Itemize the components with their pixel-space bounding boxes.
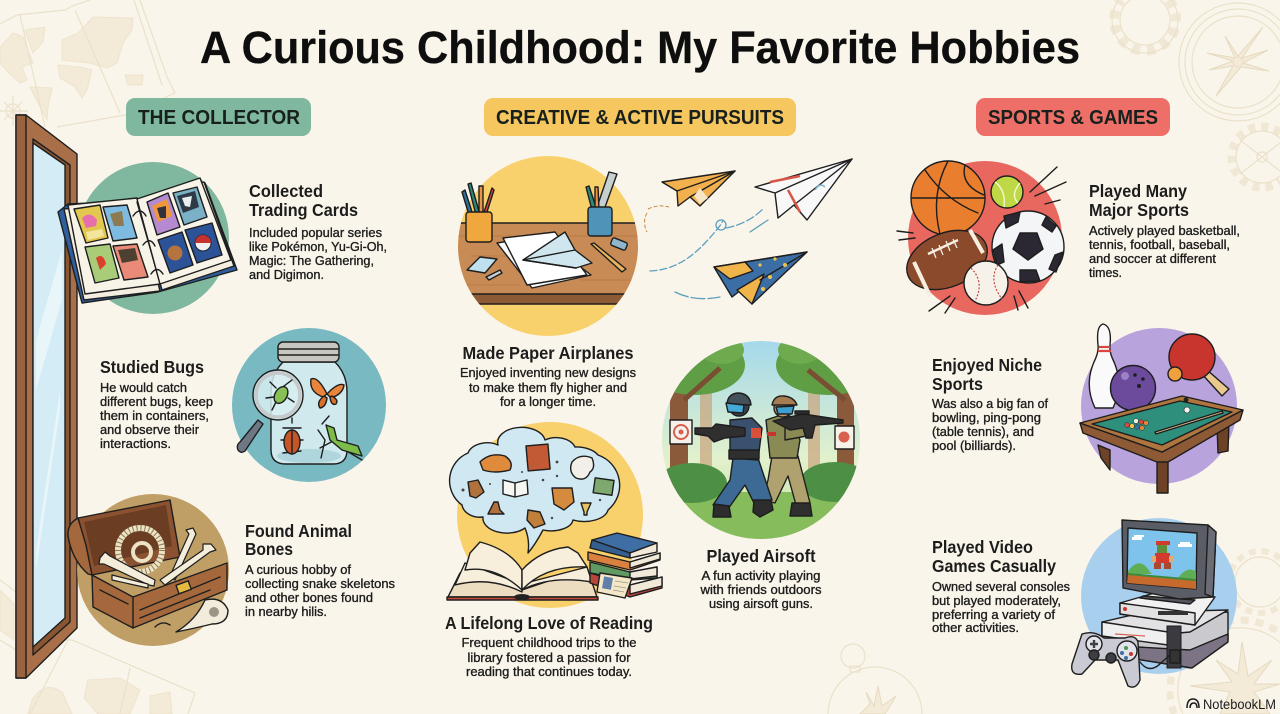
panel: studied bugs bbox=[100, 328, 386, 482]
text: found animal bones: and other bones found bbox=[245, 590, 373, 605]
icon: bug jar with magnifying glass bbox=[232, 328, 386, 482]
heading pill: the collector bbox=[126, 98, 311, 136]
decoration: pocket compass bottom center bbox=[828, 644, 922, 714]
text: played video games casually bbox=[932, 537, 1070, 635]
text: played airsoft: with friends outdoors bbox=[699, 582, 822, 597]
text: found animal bones bbox=[245, 521, 395, 619]
panel: enjoyed niche sports bbox=[932, 324, 1243, 493]
icon: airsoft players in forest bbox=[662, 341, 860, 539]
text: played many major sports: and soccer at different bbox=[1089, 251, 1216, 266]
decoration: map bottom left bbox=[0, 580, 195, 714]
text: studied bugs: interactions. bbox=[100, 436, 171, 451]
text: made paper airplanes: Enjoyed inventing new designs bbox=[460, 365, 636, 380]
icon: blue paper airplane bbox=[714, 252, 807, 304]
text: found animal bones: A curious hobby of bbox=[245, 562, 351, 577]
text: played video games casually: but played moderately, bbox=[932, 593, 1061, 608]
panel: found animal bones bbox=[68, 494, 395, 646]
text: a lifelong love of reading: A Lifelong Love of Reading bbox=[445, 613, 653, 633]
icon: sports balls bbox=[897, 161, 1066, 315]
text: made paper airplanes: Made Paper Airplanes bbox=[462, 343, 634, 363]
text: played many major sports: Major Sports bbox=[1089, 200, 1189, 220]
text: studied bugs bbox=[100, 357, 213, 451]
text: enjoyed niche sports: Enjoyed Niche bbox=[932, 355, 1042, 375]
text: played airsoft: using airsoft guns. bbox=[709, 596, 813, 611]
text: enjoyed niche sports: bowling, ping-pong bbox=[932, 410, 1041, 425]
text: collected trading cards: and Digimon. bbox=[249, 267, 324, 282]
text: played many major sports bbox=[1089, 181, 1240, 280]
text: made paper airplanes bbox=[460, 343, 636, 409]
decoration: gears and compass bottom right bbox=[1170, 551, 1280, 714]
text: played video games casually: Played Video bbox=[932, 537, 1033, 557]
text: enjoyed niche sports: Sports bbox=[932, 374, 983, 394]
heading pill: sports and games: SPORTS & GAMES bbox=[988, 107, 1158, 129]
text: enjoyed niche sports bbox=[932, 355, 1048, 453]
text: studied bugs: Studied Bugs bbox=[100, 357, 204, 377]
text: studied bugs: and observe their bbox=[100, 422, 200, 437]
text: found animal bones: Found Animal bbox=[245, 521, 352, 541]
heading pill: the collector: THE COLLECTOR bbox=[138, 107, 301, 129]
text: enjoyed niche sports: pool (billiards). bbox=[932, 438, 1016, 453]
icon: open book with thought cloud and book stack bbox=[447, 422, 662, 608]
text: found animal bones: Bones bbox=[245, 539, 293, 559]
text: collected trading cards: Magic: The Gathering, bbox=[249, 253, 374, 268]
heading pill: creative and active pursuits bbox=[484, 98, 796, 136]
text: played many major sports: Played Many bbox=[1089, 181, 1187, 201]
text: played video games casually: Games Casually bbox=[932, 556, 1056, 576]
text: studied bugs: He would catch bbox=[100, 380, 187, 395]
panel: collected trading cards bbox=[58, 162, 387, 314]
text: collected trading cards: Trading Cards bbox=[249, 200, 358, 220]
text: enjoyed niche sports: Was also a big fan of bbox=[932, 396, 1048, 411]
heading pill: sports and games bbox=[976, 98, 1170, 136]
text: played many major sports: Actively played basketball, bbox=[1089, 223, 1240, 238]
title: A Curious Childhood: My Favorite Hobbies bbox=[200, 22, 1080, 73]
icon: orange paper airplane bbox=[644, 171, 735, 232]
text: played video games casually: Owned several consoles bbox=[932, 579, 1070, 594]
text: collected trading cards bbox=[249, 181, 387, 282]
text: found animal bones: collecting snake skeletons bbox=[245, 576, 395, 591]
panel: played many major sports bbox=[897, 161, 1240, 315]
text: played airsoft: Played Airsoft bbox=[706, 546, 816, 566]
text: a lifelong love of reading: Frequent childhood trips to the bbox=[462, 635, 636, 650]
text: studied bugs: them in containers, bbox=[100, 408, 209, 423]
text: a lifelong love of reading: library fostered a passion for bbox=[468, 650, 631, 665]
icon: bowling, ping-pong and pool table bbox=[1080, 324, 1243, 493]
text: collected trading cards: Included popular series bbox=[249, 225, 382, 240]
text: collected trading cards: Collected bbox=[249, 181, 323, 201]
text: played airsoft bbox=[699, 546, 822, 611]
text: enjoyed niche sports: (table tennis), and bbox=[932, 424, 1034, 439]
text: made paper airplanes: to make them fly higher and bbox=[469, 380, 627, 395]
text: found animal bones: in nearby hilis. bbox=[245, 604, 327, 619]
icon: desk with paper and pencils bbox=[450, 156, 646, 336]
illustration: mirror bbox=[16, 115, 77, 678]
text: played many major sports: tennis, football, baseball, bbox=[1089, 237, 1230, 252]
decoration: world map top left bbox=[0, 0, 175, 127]
icon: trading card binder bbox=[58, 162, 237, 314]
text: played video games casually: preferring a variety of bbox=[932, 607, 1055, 622]
text: played many major sports: times. bbox=[1089, 265, 1122, 280]
decoration: gears and compass top right bbox=[1112, 0, 1280, 187]
icon: retro console and controller bbox=[1072, 518, 1237, 687]
panel: made paper airplanes bbox=[450, 156, 852, 409]
panel: a lifelong love of reading bbox=[445, 422, 662, 679]
text: played video games casually: other activities. bbox=[932, 620, 1019, 635]
icon: white paper airplane bbox=[755, 159, 852, 220]
text: studied bugs: different bugs, keep bbox=[100, 394, 213, 409]
text: made paper airplanes: for a longer time. bbox=[500, 394, 596, 409]
icon: treasure chest with bones bbox=[68, 494, 229, 646]
text: a lifelong love of reading: reading that continues today. bbox=[466, 664, 632, 679]
panel: played video games casually bbox=[932, 518, 1237, 687]
text: played airsoft: A fun activity playing bbox=[702, 568, 820, 583]
text: collected trading cards: like Pokémon, Yu-Gi-Oh, bbox=[249, 239, 387, 254]
heading pill: creative and active pursuits: CREATIVE & ACTIVE PURSUITS bbox=[496, 107, 784, 129]
text: a lifelong love of reading bbox=[445, 613, 653, 679]
icon: flight trails bbox=[650, 208, 768, 299]
panel: played airsoft bbox=[662, 341, 860, 611]
